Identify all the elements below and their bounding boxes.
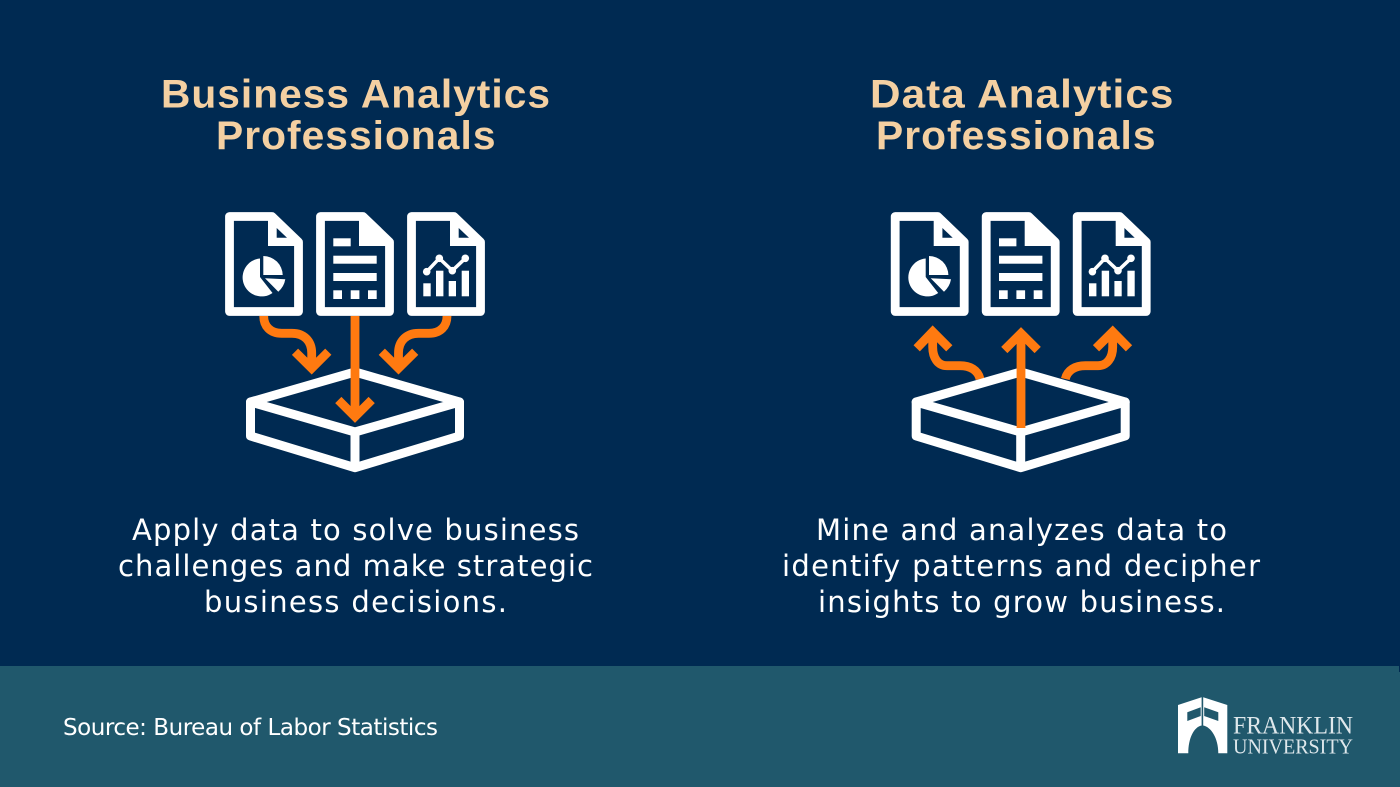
heading: business analytics professionals: Business Analytics: [161, 72, 551, 116]
description: data analytics: Mine and analyzes data to: [816, 513, 1227, 547]
description: data analytics: identify patterns and decipher: [782, 549, 1260, 583]
logo wordmark: UNIVERSITY: [1233, 736, 1353, 758]
icon: pie chart document: [230, 214, 301, 312]
icon: pie chart document: [895, 214, 967, 312]
icon: bar and line chart document: [1077, 214, 1149, 312]
heading: business analytics professionals: Professionals: [216, 114, 496, 158]
icon: text document: [320, 214, 392, 312]
arrow: box to left document: [917, 332, 980, 379]
logo mark: [1178, 697, 1227, 753]
icon: bar and line chart document: [412, 214, 483, 312]
logo wordmark: [1233, 712, 1353, 758]
arrow: box to middle document: [1004, 333, 1038, 428]
description: business analytics: challenges and make strategic: [118, 549, 593, 583]
heading: business analytics professionals: [161, 72, 551, 158]
heading: data analytics professionals: [870, 72, 1174, 158]
description: data analytics: [782, 513, 1260, 619]
arrow: right document to box: [382, 316, 447, 368]
description: data analytics: insights to grow business.: [818, 585, 1225, 619]
panel: business analytics professionals: [118, 72, 593, 619]
icon: open box: [916, 372, 1125, 468]
heading: data analytics professionals: Data Analytics: [870, 72, 1174, 116]
logo wordmark: FRANKLIN: [1233, 712, 1353, 739]
description: business analytics: Apply data to solve business: [132, 513, 579, 547]
arrow: middle document to box: [338, 316, 372, 417]
arrow: box to right document: [1065, 332, 1129, 379]
icon: open box: [250, 372, 460, 468]
heading: data analytics professionals: Professionals: [876, 114, 1156, 158]
footer band: [0, 666, 1400, 787]
source note: Source: Bureau of Labor Statistics: [63, 715, 438, 741]
description: business analytics: business decisions.: [204, 585, 507, 619]
icon: data flowing out of box to documents: [895, 214, 1149, 468]
icon: documents flowing into box: [230, 214, 483, 468]
panel: data analytics professionals: [782, 72, 1260, 619]
icon: text document: [986, 214, 1058, 312]
description: business analytics: [118, 513, 593, 619]
arrow: left document to box: [264, 316, 328, 368]
logo: franklin university: [1178, 697, 1353, 758]
